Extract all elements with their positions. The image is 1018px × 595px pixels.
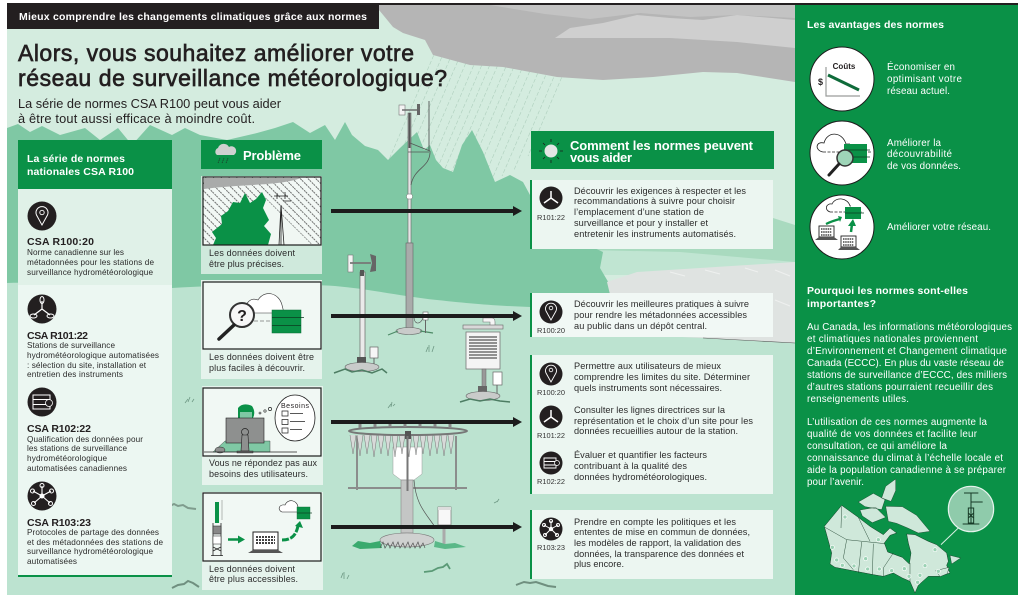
benefit: savings: Économiser en: [887, 62, 955, 73]
benefit: discoverability: Améliorer la: [887, 138, 942, 149]
icon: R103:23: R103:23: [537, 543, 565, 552]
solution card 3: données hydrométéorologiques.: [574, 472, 707, 482]
solution card 1: l’emplacement d’une station de: [574, 207, 704, 217]
solution card 1: Découvrir les exigences à respecter et les: [574, 186, 746, 196]
paragraph: benefits of use: [807, 417, 1007, 488]
standard: R101:22: hydrométéorologique automatisées: [27, 351, 159, 360]
standard: R101:22: : sélection du site, installation et: [27, 361, 147, 370]
standard: R103:23: automatisées: [27, 557, 77, 566]
heading: why standards matter: importantes?: [807, 298, 876, 310]
tree line: [7, 122, 623, 325]
solution card 3: [530, 355, 773, 494]
problem card 4: accessibility: être plus accessibles.: [209, 574, 298, 584]
panel: CSA R100 series: [18, 140, 172, 577]
icon: cost chart: $: [818, 77, 823, 87]
icon: anemometer: [28, 294, 56, 324]
solution card 3: Évaluer et quantifier les facteurs: [574, 450, 707, 460]
icon: data sharing network: [28, 482, 56, 510]
standard: R100:20: CSA R100:20: [27, 236, 94, 248]
header bar: Mieux comprendre les changements climatiques grâce aux normes: [19, 11, 367, 23]
paragraph: Canadian context: stations de surveillance d’ECCC, des milliers: [807, 370, 1007, 381]
icon: network: [810, 195, 874, 259]
header bar: [7, 4, 379, 29]
solution card 2: [530, 293, 773, 337]
title: Alors, vous souhaitez améliorer votre: [18, 40, 414, 66]
illustration: rain, tree and tower: [203, 177, 321, 245]
problem card 1: precision: [201, 176, 322, 274]
hills: [585, 218, 795, 275]
benefit: discoverability: [887, 138, 961, 172]
benefit: savings: réseau actuel.: [887, 86, 950, 97]
title: réseau de surveillance météorologique?: [18, 65, 447, 91]
solution card 1: recommandations à suivre pour choisir: [574, 196, 735, 206]
solution card 1: [530, 180, 773, 249]
icon: cost chart: Coûts: [833, 62, 856, 71]
solution card 3: comprendre les limites du site. Déterminer: [574, 372, 750, 382]
paragraph: benefits of use: consultation, ce qui améliore la: [807, 441, 948, 452]
arrow: problem 3 to solution: [331, 417, 522, 427]
storm clouds: [379, 5, 795, 82]
solution card 1: surveillance et pour y installer et: [574, 218, 708, 228]
icon: R101:22: [537, 186, 565, 222]
standard: R103:23: surveillance hydrométéorologique: [27, 547, 153, 556]
subtitle: La série de normes CSA R100 peut vous aider: [18, 96, 282, 111]
icon: data discovery: [810, 121, 874, 185]
rain: [388, 50, 564, 184]
problem card 3: user needs: Vous ne répondez pas aux: [209, 458, 318, 468]
standard: R103:23: et des métadonnées des stations de: [27, 538, 163, 547]
solution card 3: Consulter les lignes directrices sur la: [574, 405, 726, 415]
paragraph: benefits of use: L’utilisation de ces normes augmente la: [807, 417, 988, 428]
icon: location pin: [28, 202, 56, 230]
standard: R100:20: métadonnées pour les stations de: [27, 258, 154, 267]
illustration: small wind station: [334, 254, 387, 373]
standard: R103:23: Protocoles de partage des données: [27, 528, 159, 537]
icon: data qualification: [28, 388, 56, 416]
standard: R100:20: surveillance hydrométéorologique: [27, 268, 153, 277]
panel heading: nationales CSA R100: [27, 166, 134, 178]
icon: R103:23: [537, 518, 565, 552]
subtitle: [18, 96, 282, 126]
paragraph: Canadian context: Canada (ECCC). En plus du vaste réseau de: [807, 358, 1005, 369]
standard: R102:22: automatisées canadiennes: [27, 464, 127, 473]
illustration: magnifier and data: ?: [237, 308, 247, 325]
panel heading: how the standards help: vous aider: [570, 150, 632, 165]
benefit: savings: optimisant votre: [887, 74, 963, 85]
solution card 4: données, la transparence des données et: [574, 549, 744, 559]
solution card 4: les modèles de rapport, la validation des: [574, 538, 741, 548]
solution card 3: contribuant à la qualité des: [574, 461, 687, 471]
paragraph: Canadian context: renseignements utiles.: [807, 394, 909, 405]
icon: R101:22: [537, 406, 565, 440]
standard: R103:23: CSA R103:23: [27, 517, 91, 529]
paragraph: benefits of use: aide la population canadienne à se préparer: [807, 465, 1007, 476]
ground: [7, 283, 795, 595]
benefit: discoverability: de vos données.: [887, 161, 961, 172]
problem card 2: discoverability: [201, 280, 322, 379]
problem card 4: accessibility: [202, 492, 323, 590]
icon: R102:22: [537, 452, 565, 486]
standard: R101:22: Stations de surveillance: [27, 341, 115, 350]
problem card 1: precision: Les données doivent: [209, 248, 295, 258]
paragraph: benefits of use: connaissance du climat à l’échelle locale et: [807, 453, 1003, 464]
grass tufts: [168, 345, 556, 588]
title: [18, 40, 447, 91]
standard: R100:20: Norme canadienne sur les: [27, 248, 124, 257]
illustration: person at computer: Besoins: [281, 403, 310, 410]
paragraph: Canadian context: [807, 322, 1012, 405]
problem card 3: user needs: besoins des utilisateurs.: [209, 469, 308, 479]
callout: station detail: [948, 486, 994, 532]
road: [607, 262, 795, 344]
illustration: data transfer: [203, 493, 321, 561]
standard: R102:22: hydrométéorologique: [27, 454, 107, 463]
panel heading: [18, 140, 172, 189]
icon: R101:22: R101:22: [537, 431, 565, 440]
benefit: improve network: Améliorer votre réseau.: [887, 222, 991, 233]
standard: R102:22: [27, 423, 143, 473]
heading: benefits: Les avantages des normes: [807, 19, 944, 31]
illustration: tall mast station: [388, 101, 433, 335]
icon: sun: [539, 139, 563, 163]
illustration: precipitation gauge: [348, 423, 467, 549]
icon: R100:20: [537, 362, 565, 397]
problem card 3: user needs: [202, 386, 323, 485]
illustration: instrument shelter: [460, 318, 510, 402]
problem card 2: discoverability: Les données doivent être: [209, 352, 314, 362]
icon: R101:22: R101:22: [537, 213, 565, 222]
standard: R101:22: entretien des instruments: [27, 370, 123, 379]
standard: R101:22: CSA R101:22: [27, 330, 88, 342]
arrow: problem 2 to solution: [331, 311, 522, 321]
paragraph: benefits of use: qualité de vos données et facilite leur: [807, 429, 978, 440]
heading: why standards matter: Pourquoi les normes sont-elles: [807, 285, 968, 297]
benefit: discoverability: découvrabilité: [887, 149, 953, 160]
icon: R100:20: [537, 300, 565, 335]
solution card 2: au public dans un dépôt central.: [574, 321, 707, 331]
solution card 4: plus encore.: [574, 559, 624, 569]
paragraph: Canadian context: Au Canada, les informations météorologiques: [807, 322, 1012, 333]
paragraph: Canadian context: d’Environnement et Changement climatique: [807, 346, 1008, 357]
solution card 4: ententes de mise en commun de données,: [574, 527, 750, 537]
problem card 2: discoverability: plus faciles à découvrir.: [209, 363, 305, 373]
solution card 2: Découvrir les meilleures pratiques à suivre: [574, 299, 749, 309]
icon: cost chart: [810, 47, 874, 111]
solution card 2: pour rendre les métadonnées accessibles: [574, 310, 747, 320]
standard: R102:22: Qualification des données pour: [27, 435, 143, 444]
benefit: savings: [887, 62, 963, 97]
problem card 1: precision: être plus précises.: [209, 259, 284, 269]
solution card 3: représentation et le choix d’un site pour les: [574, 416, 753, 426]
arrow: problem 1 to solution: [331, 206, 522, 216]
paragraph: Canadian context: d’autres stations pourraient recueillir des: [807, 382, 993, 393]
solution card 3: quels instruments sont nécessaires.: [574, 383, 722, 393]
solution card 4: Prendre en compte les politiques et les: [574, 517, 736, 527]
paragraph: benefits of use: pour l’avenir.: [807, 477, 864, 488]
panel heading: how the standards help: Comment les normes peuvent: [570, 138, 754, 153]
heading: why standards matter: [807, 285, 968, 310]
standard: R103:23: [27, 517, 163, 566]
standard: R102:22: les stations de surveillance: [27, 444, 127, 453]
standard: R101:22: [27, 330, 159, 379]
panel heading: La série de normes: [27, 153, 125, 165]
problem card 4: accessibility: Les données doivent: [209, 564, 295, 574]
icon: R100:20: R100:20: [537, 326, 565, 335]
subtitle: à être tout aussi efficace à moindre coût.: [18, 111, 255, 126]
icon: R102:22: R102:22: [537, 477, 565, 486]
paragraph: Canadian context: et climatiques nationales proviennent: [807, 334, 978, 345]
solution card 4: [530, 510, 773, 579]
panel: benefits sidebar: [795, 5, 1018, 595]
arrow: problem 4 to solution: [331, 522, 522, 532]
map of Canada: [824, 479, 994, 593]
solution card 3: Permettre aux utilisateurs de mieux: [574, 361, 721, 371]
icon: R100:20: R100:20: [537, 388, 565, 397]
panel heading: Problème: [201, 140, 322, 169]
solution card 3: données recueillies autour de la station.: [574, 426, 738, 436]
icon: rain cloud: [215, 144, 236, 163]
panel heading: Problème: Problème: [243, 148, 301, 163]
panel heading: how the standards help: [531, 131, 774, 169]
standard: R100:20: [27, 236, 154, 277]
solution card 1: entretenir les instruments automatisés.: [574, 229, 736, 239]
standard: R102:22: CSA R102:22: [27, 423, 91, 435]
